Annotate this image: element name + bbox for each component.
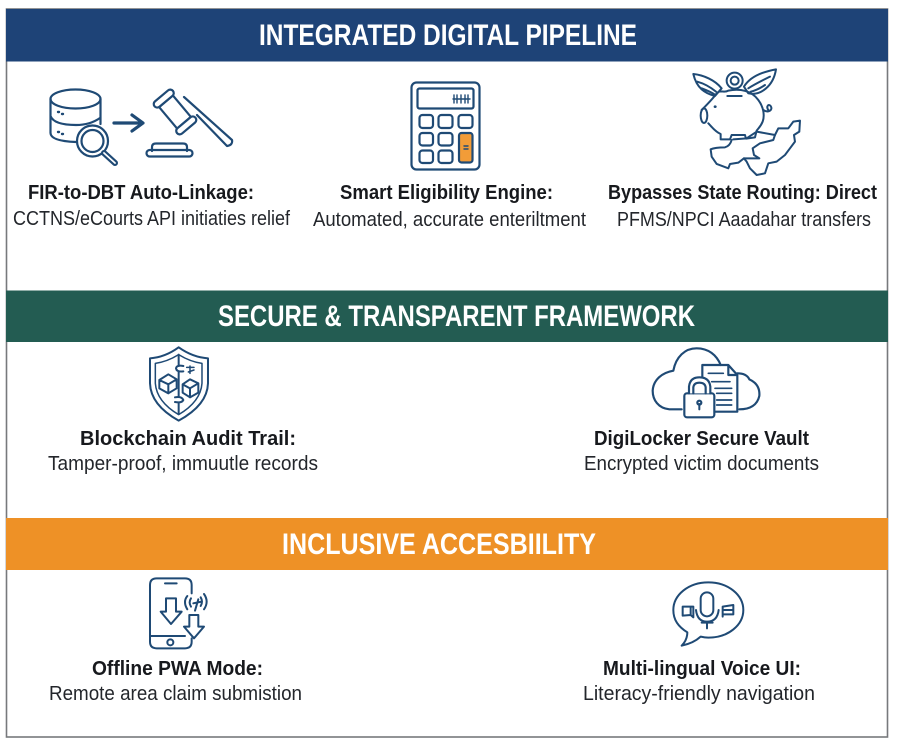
icon: winged piggy bank over map [693, 69, 800, 175]
text: smart eligibility: Automated, accurate enteriltment [313, 209, 586, 231]
icon: phone download signal [150, 578, 207, 648]
text: bypasses: Bypasses State Routing: Direct [608, 182, 877, 204]
text: blockchain: Tamper-proof, immuutle records [48, 453, 318, 475]
header band: green [6, 290, 888, 342]
header band: blue [6, 9, 888, 62]
text: digilocker [584, 428, 819, 475]
panel: inclusive accessibility [6, 518, 888, 705]
heading: secure and transparent: SECURE & TRANSPARENT FRAMEWORK [218, 300, 695, 333]
text: smart eligibility [313, 182, 586, 231]
icon: voice speech bubble [673, 582, 743, 646]
text: smart eligibility: Smart Eligibility Engine: [340, 182, 553, 204]
text: bypasses: PFMS/NPCI Aaadahar transfers [617, 209, 871, 231]
panel: integrated digital pipeline [6, 9, 888, 231]
text: FIR-to-DBT: FIR-to-DBT Auto-Linkage: [28, 182, 254, 204]
text: blockchain: Blockchain Audit Trail: [80, 428, 296, 450]
heading: inclusive accessibility: INCLUSIVE ACCESBIILITY [282, 528, 596, 561]
icon: database search to gavel [50, 88, 232, 163]
header band: orange [6, 518, 888, 570]
text: FIR-to-DBT: CCTNS/eCourts API initiaties relief [13, 208, 290, 230]
icon: calculator [412, 82, 480, 170]
icon: blockchain shield [150, 347, 208, 421]
text: FIR-to-DBT [13, 182, 290, 230]
text: digilocker: Encrypted victim documents [584, 453, 819, 475]
text: blockchain [48, 428, 318, 475]
heading: integrated digital pipeline: INTEGRATED DIGITAL PIPELINE [259, 19, 637, 52]
text: offline: Remote area claim submistion [49, 683, 302, 705]
text: digilocker: DigiLocker Secure Vault [594, 428, 809, 450]
text: offline: Offline PWA Mode: [92, 658, 263, 680]
text: multilingual: Literacy-friendly navigation [583, 683, 815, 705]
text: offline [49, 658, 302, 705]
text: multilingual: Multi-lingual Voice UI: [603, 658, 801, 680]
text: multilingual [583, 658, 815, 705]
text: bypasses [608, 182, 877, 231]
panel: secure and transparent framework [6, 290, 888, 475]
icon: cloud document lock [653, 348, 759, 417]
